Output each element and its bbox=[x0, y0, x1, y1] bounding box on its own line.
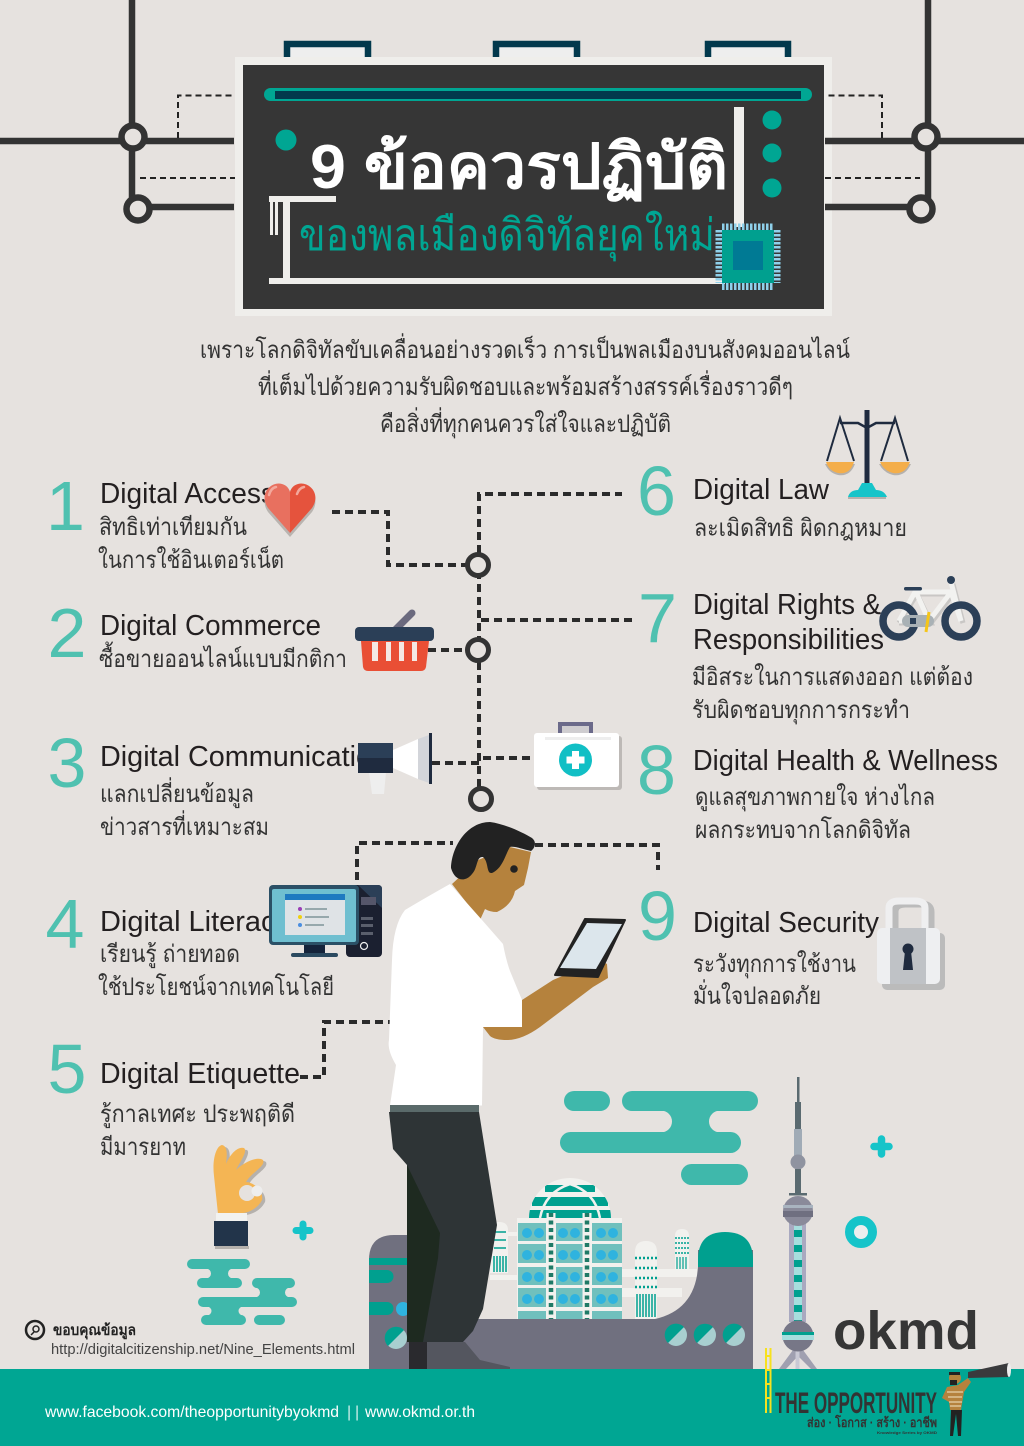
item 3: Digital Communication bbox=[48, 724, 432, 841]
belt bbox=[390, 1105, 479, 1112]
item 6: Digital Law: 6 bbox=[637, 452, 676, 530]
item 8: Digital Health & Wellness: ผลกระทบจากโลกดิจิทัล bbox=[695, 816, 911, 844]
intro paragraph: ที่เต็มไปด้วยความรับผิดชอบและพร้อมสร้างสรรค์เรื่องราวดีๆ bbox=[258, 370, 793, 401]
item 9: Digital Security: Digital Security bbox=[693, 907, 879, 939]
item 7: Digital Rights & Responsibilities: รับผิดชอบทุกการกระทำ bbox=[692, 697, 910, 725]
item 2: Digital Commerce bbox=[48, 594, 434, 673]
TV tower bbox=[779, 1077, 817, 1369]
intro paragraph: คือสิ่งที่ทุกคนควรใส่ใจและปฏิบัติ bbox=[380, 407, 671, 439]
footer links: www.okmd.or.th bbox=[364, 1404, 475, 1421]
person holding tablet bbox=[389, 822, 625, 1369]
item 4: Digital Literacy: เรียนรู้ ถ่ายทอด bbox=[100, 941, 240, 969]
item 4: Digital Literacy: Digital Literacy bbox=[100, 906, 290, 938]
item 5: Digital Etiquette: รู้กาลเทศะ ประพฤติดี bbox=[100, 1101, 295, 1129]
item 1: Digital Access: Digital Access bbox=[100, 478, 275, 510]
wordmark small: Knowledge Series by OKMD bbox=[877, 1430, 937, 1435]
item 3: Digital Communication: 3 bbox=[48, 724, 86, 802]
top bar bbox=[264, 88, 812, 101]
footer links: || bbox=[347, 1404, 359, 1421]
item 2: Digital Commerce: 2 bbox=[48, 594, 86, 672]
item 6: Digital Law: Digital Law bbox=[693, 474, 830, 506]
The Opportunity logo bbox=[766, 1348, 1011, 1436]
circuit lines: left bbox=[0, 0, 240, 220]
icon: man with telescope bbox=[942, 1363, 1011, 1436]
item 1: Digital Access: ในการใช้อินเตอร์เน็ต bbox=[98, 545, 284, 574]
icon: plus right bbox=[874, 1139, 889, 1154]
item 8: Digital Health & Wellness: Digital Health & Wellness bbox=[693, 745, 998, 777]
arm bbox=[483, 960, 608, 1040]
icon: megaphone bbox=[358, 733, 432, 794]
small tower middle bbox=[635, 1241, 657, 1319]
item 9: Digital Security: ระวังทุกการใช้งาน bbox=[693, 950, 856, 979]
icon: first aid kit bbox=[534, 724, 622, 790]
item 8: Digital Health & Wellness: ดูแลสุขภาพกายใจ ห่างไกล bbox=[695, 783, 935, 812]
connector tabs bbox=[287, 44, 788, 57]
domed building bbox=[517, 1178, 622, 1319]
item 9: Digital Security bbox=[638, 877, 945, 1010]
item 2: Digital Commerce: Digital Commerce bbox=[100, 610, 321, 642]
intro paragraph bbox=[200, 333, 850, 439]
dashed connector network bbox=[300, 494, 658, 1077]
item 7: Digital Rights & Responsibilities: มีอิสระในการแสดงออก แต่ต้อง bbox=[692, 663, 973, 691]
hair bbox=[451, 822, 535, 879]
okmd logo: okmd bbox=[833, 1301, 979, 1361]
item 5: Digital Etiquette: มีมารยาท bbox=[100, 1134, 186, 1161]
item 7: Digital Rights & Responsibilities: Digital Rights & bbox=[693, 589, 881, 621]
item 9: Digital Security: 9 bbox=[638, 877, 677, 955]
icon: shopping basket bbox=[355, 613, 434, 671]
item 3: Digital Communication: Digital Communication bbox=[100, 741, 388, 773]
title text: 9 ข้อควรปฏิบัติ bbox=[310, 133, 728, 202]
grey base building bbox=[369, 1232, 753, 1369]
item 1: Digital Access: 1 bbox=[46, 467, 85, 545]
subtitle text: ของพลเมืองดิจิทัลยุคใหม่ bbox=[299, 210, 715, 262]
footer band bbox=[0, 1369, 1024, 1446]
clouds: right cluster bbox=[560, 1091, 758, 1185]
icon: heart bbox=[265, 484, 315, 537]
wordmark Thai: ส่อง · โอกาส · สร้าง · อาชีพ bbox=[807, 1414, 937, 1430]
icon: yellow ladder bbox=[766, 1348, 770, 1413]
item 5: Digital Etiquette: Digital Etiquette bbox=[100, 1058, 300, 1090]
icon: padlock bbox=[877, 901, 945, 990]
intro paragraph: เพราะโลกดิจิทัลขับเคลื่อนอย่างรวดเร็ว การเป็นพลเมืองบนสังคมออนไลน์ bbox=[200, 333, 850, 364]
footer links bbox=[44, 1404, 475, 1421]
item 6: Digital Law: ละเมิดสิทธิ ผิดกฎหมาย bbox=[694, 515, 907, 542]
circuit lines: right bbox=[825, 0, 1024, 220]
source credit: ขอบคุณข้อมูล bbox=[53, 1322, 136, 1340]
item 1: Digital Access bbox=[46, 467, 315, 574]
source credit: http://digitalcitizenship.net/Nine_Elements.html bbox=[51, 1341, 355, 1358]
item 5: Digital Etiquette: 5 bbox=[48, 1030, 86, 1108]
icon: plus left bbox=[296, 1224, 310, 1237]
item 7: Digital Rights & Responsibilities: Responsibilities bbox=[693, 624, 884, 656]
item 4: Digital Literacy: ใช้ประโยชน์จากเทคโนโลยี bbox=[98, 973, 334, 1001]
white connector bands bbox=[490, 1232, 697, 1297]
item 3: Digital Communication: ข่าวสารที่เหมาะสม bbox=[100, 810, 269, 841]
icon: OK hand bbox=[213, 1145, 266, 1249]
item 4: Digital Literacy: 4 bbox=[46, 885, 84, 963]
title panel bbox=[235, 44, 832, 316]
small tower left bbox=[490, 1222, 508, 1273]
item 6: Digital Law bbox=[637, 410, 911, 542]
item 3: Digital Communication: แลกเปลี่ยนข้อมูล bbox=[100, 777, 254, 809]
icon: scales of justice bbox=[825, 410, 911, 499]
circuit trace frame bbox=[269, 107, 744, 284]
footer links: www.facebook.com/theopportunitybyokmd bbox=[44, 1404, 339, 1421]
trousers bbox=[389, 1112, 497, 1342]
trouser shadow bbox=[407, 1165, 440, 1342]
icon: ring bbox=[850, 1220, 872, 1244]
item 9: Digital Security: มั่นใจปลอดภัย bbox=[693, 979, 821, 1010]
decorative dots bbox=[276, 110, 782, 198]
face bbox=[452, 847, 531, 920]
source credit bbox=[26, 1321, 355, 1358]
shirt bbox=[389, 884, 522, 1106]
cityscape: buildings bbox=[369, 1178, 753, 1369]
icon: desktop computer bbox=[269, 885, 382, 957]
item 1: Digital Access: สิทธิเท่าเทียมกัน bbox=[99, 514, 247, 541]
icon: magnifier bbox=[26, 1321, 44, 1339]
icon: bicycle bbox=[883, 576, 977, 637]
item 7: Digital Rights & Responsibilities bbox=[638, 576, 977, 725]
icon: microchip bbox=[719, 227, 777, 286]
item 5: Digital Etiquette bbox=[48, 1030, 300, 1249]
item 2: Digital Commerce: ซื้อขายออนไลน์แบบมีกติกา bbox=[99, 641, 347, 673]
clouds: left cluster bbox=[187, 1259, 297, 1325]
item 8: Digital Health & Wellness: 8 bbox=[637, 731, 676, 809]
item 4: Digital Literacy bbox=[46, 885, 382, 1001]
eye bbox=[510, 865, 518, 873]
tablet bbox=[555, 919, 625, 977]
shoes bbox=[409, 1342, 510, 1369]
item 8: Digital Health & Wellness bbox=[534, 724, 998, 844]
item 7: Digital Rights & Responsibilities: 7 bbox=[638, 579, 677, 657]
small tower right bbox=[675, 1229, 689, 1269]
